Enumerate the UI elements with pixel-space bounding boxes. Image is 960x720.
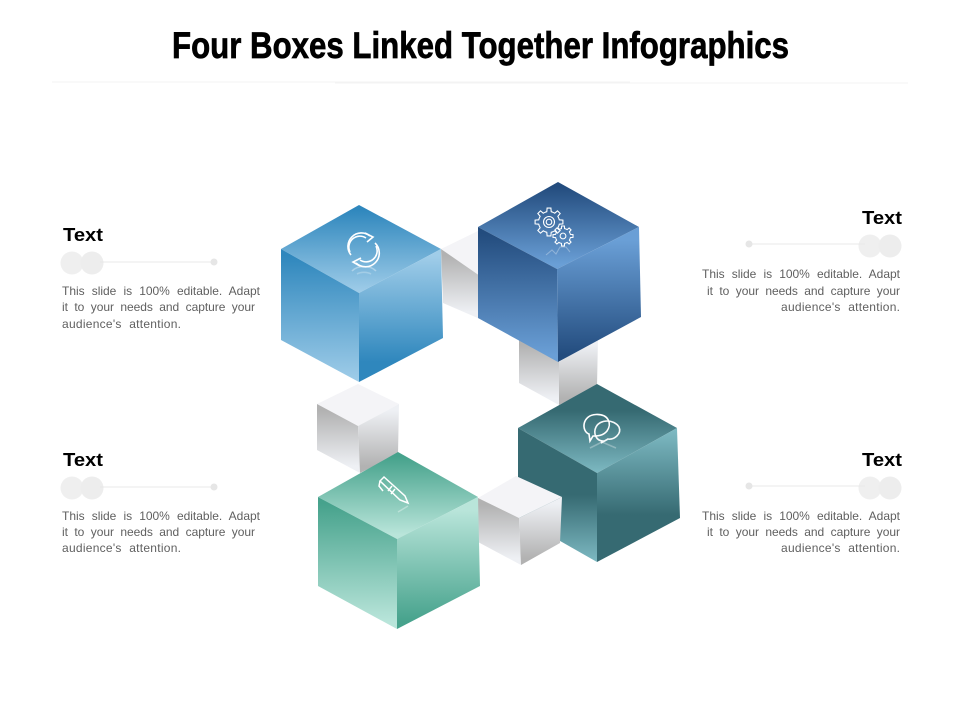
text block: bottom right: it to your needs and capture your — [707, 525, 900, 539]
text block: top left: Text — [63, 224, 103, 245]
cube: teal — [518, 384, 680, 562]
text block: bottom left: audience's attention. — [62, 541, 181, 555]
connector cube: between dark blue and teal — [519, 338, 598, 405]
cube: green — [318, 452, 480, 629]
connector cube: between teal and green — [478, 476, 562, 565]
text block: bottom left: This slide is 100% editable. Adapt — [62, 509, 261, 523]
text block: top right — [702, 207, 902, 314]
text block: top left: it to your needs and capture your — [62, 300, 255, 314]
icon: gears — [535, 208, 573, 255]
text block: bottom right: audience's attention. — [781, 541, 900, 555]
text block: bottom left — [60, 449, 261, 555]
cube: dark blue — [478, 182, 641, 362]
cube: light blue — [281, 205, 443, 382]
text block: top right: it to your needs and capture your — [707, 284, 900, 298]
icon: pen — [379, 477, 408, 512]
text block: top left: audience's attention. — [62, 317, 181, 331]
text block: bottom right: This slide is 100% editable. Adapt — [702, 509, 901, 523]
text block: top right: This slide is 100% editable. Adapt — [702, 267, 901, 281]
icon: refresh arrows — [348, 233, 379, 274]
text block: top right: Text — [862, 207, 902, 228]
connector cube: between light blue and dark blue — [441, 230, 480, 319]
text block: top right: audience's attention. — [781, 300, 900, 314]
title: Four Boxes Linked Together Infographics — [172, 25, 789, 66]
text block: bottom right: Text — [862, 449, 902, 470]
text block: bottom left: it to your needs and capture your — [62, 525, 255, 539]
text block: bottom left: Text — [63, 449, 103, 470]
icon: speech bubbles — [584, 414, 620, 448]
text block: top left: This slide is 100% editable. Adapt — [62, 284, 261, 298]
connector cube: between light blue and green — [317, 384, 399, 473]
text block: bottom right — [702, 449, 902, 555]
text block: top left — [60, 224, 261, 331]
